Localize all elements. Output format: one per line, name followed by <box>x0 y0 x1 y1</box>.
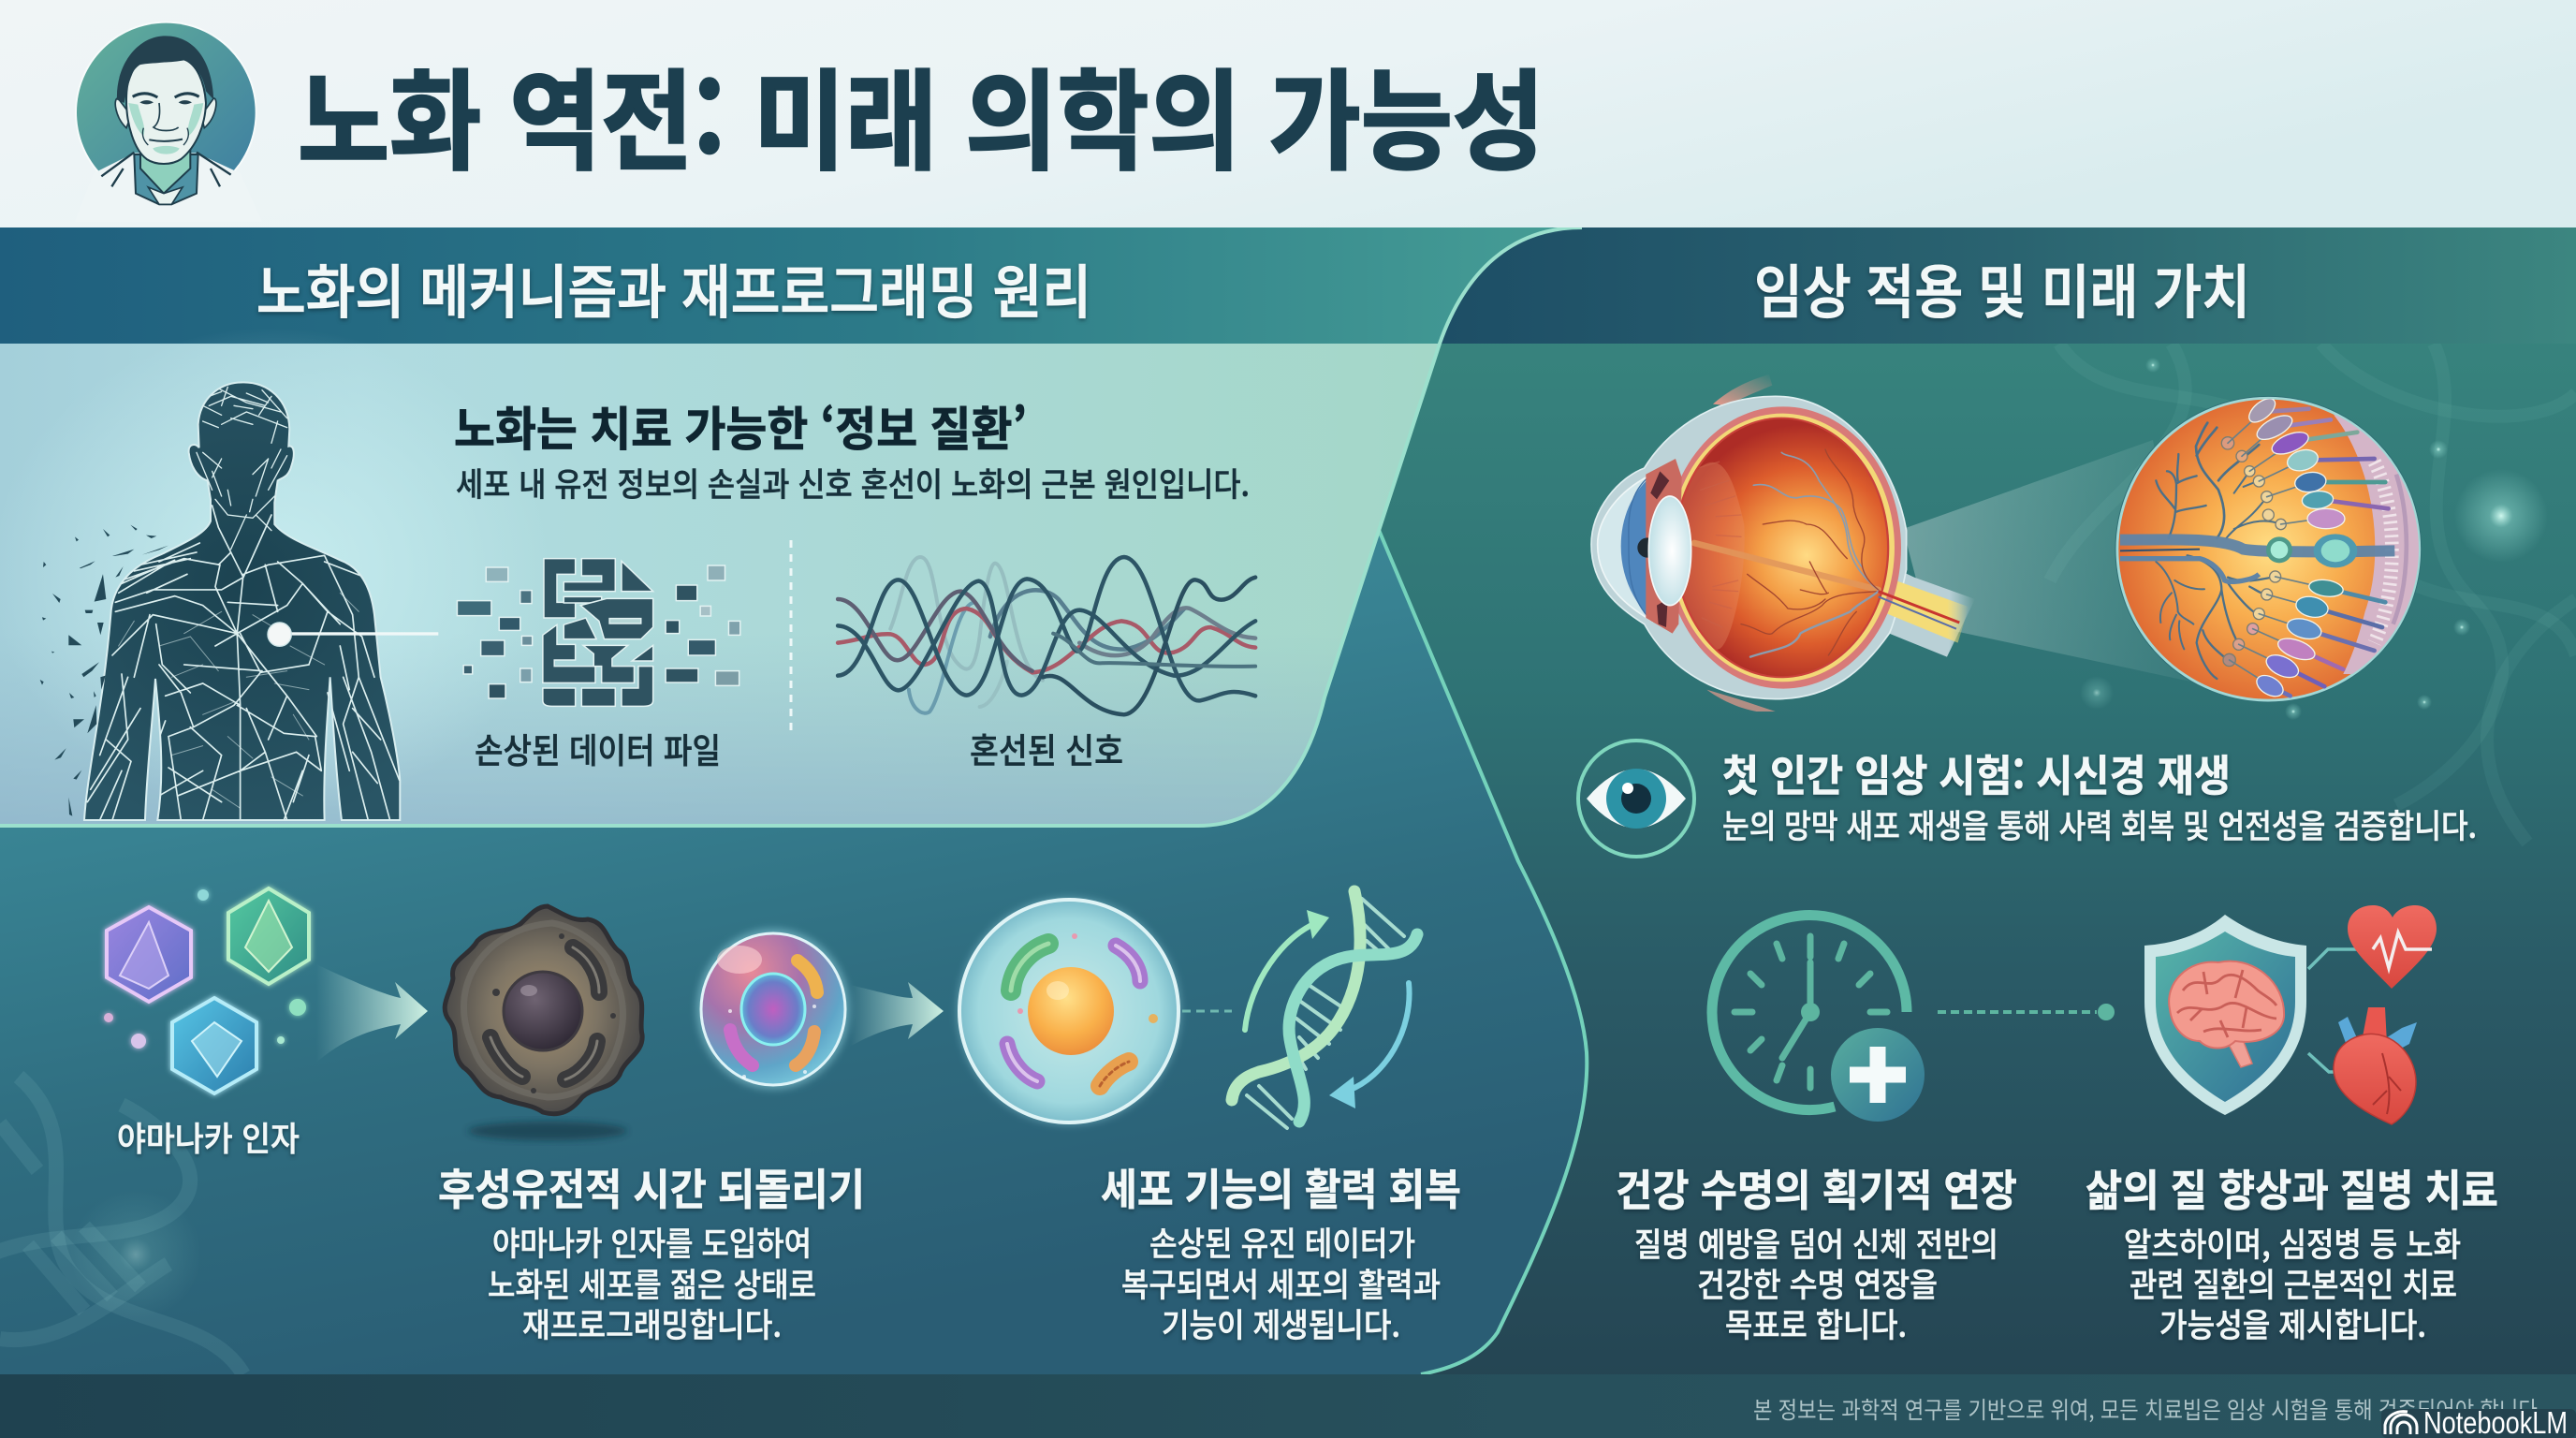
optic nerve <box>1870 574 1969 643</box>
DNA strand light <box>1289 934 1417 1122</box>
page header background <box>0 0 2576 227</box>
description: retinal regeneration: 눈의 망막 새포 재생을 통해 사력 회복 및 언전성을 검증합니다. <box>1722 800 2477 848</box>
receptor cells <box>2245 394 2345 700</box>
floating particles <box>104 889 306 1049</box>
eye muscles <box>1713 374 1772 405</box>
illustration: rejuvenated cell <box>957 897 1181 1125</box>
divider between icons <box>790 540 792 730</box>
title: 노화 역전: 미래 의학의 가능성 <box>298 35 1544 192</box>
label: tangled signal: 혼선된 신호 <box>970 723 1123 773</box>
illustration: magnified retina <box>2115 394 2422 702</box>
light top-left panel <box>0 344 1440 826</box>
description line 3: 기능이 제생됩니다. <box>1162 1299 1400 1347</box>
description line 2: 복구되면서 세포의 활력과 <box>1121 1259 1441 1307</box>
description line 3: 가능성을 제시합니다. <box>2159 1299 2426 1347</box>
illustration: reprogramming cell <box>696 929 850 1090</box>
purple crystal <box>107 907 191 1002</box>
label: Yamanaka factor: 야마나카 인자 <box>117 1112 300 1161</box>
marker dot and leader line <box>268 623 438 646</box>
brain <box>2169 961 2284 1067</box>
description line 1: 질병 예방을 덤어 신체 전반의 <box>1634 1219 1998 1267</box>
lower panel border <box>1379 530 1587 1374</box>
figure: fractured human body <box>40 382 438 820</box>
avatar: doctor portrait <box>75 22 262 222</box>
retina yellow ring <box>1670 414 1895 682</box>
ciliary body <box>1646 459 1682 634</box>
right panel background <box>1217 227 2576 1438</box>
light panel border <box>0 227 1582 826</box>
text block: epigenetic rewind <box>438 1156 865 1347</box>
icon: damaged data file <box>457 559 740 706</box>
receptor cell tails <box>2228 409 2389 696</box>
lower left panel <box>0 530 1587 1374</box>
description line 1: 알츠하이며, 심정병 등 노화 <box>2124 1219 2461 1267</box>
renewal arrow blue <box>1348 983 1410 1091</box>
description line 2: 관련 질환의 근본적인 치료 <box>2130 1259 2457 1307</box>
description line 1: 손상된 유진 테이터가 <box>1149 1218 1415 1266</box>
optic nerve sheath <box>1872 562 1975 657</box>
description line 2: 노화된 세포를 젊은 상태로 <box>488 1259 816 1307</box>
heading: 건강 수명의 획기적 연장 <box>1616 1157 2017 1219</box>
sclera <box>1591 396 1907 699</box>
figure crack lines <box>86 386 399 819</box>
optic nerve vessels <box>1879 592 1959 623</box>
heading: 삶의 질 향상과 질병 치료 <box>2086 1157 2498 1219</box>
glow behind figure <box>0 328 552 814</box>
icon: connectors to hearts <box>2308 949 2378 1072</box>
heading: information disease: 노화는 치료 가능한 ‘정보 질환’ <box>454 392 1027 460</box>
icon: eye badge <box>1578 741 1694 857</box>
cone: zoom beam from eye to retina <box>1903 440 2200 683</box>
arrow: to young cell <box>850 982 944 1047</box>
text block: cell vitality <box>1101 1156 1461 1347</box>
illustration: aged cell <box>445 906 642 1114</box>
choroid <box>1665 406 1901 689</box>
green crystal <box>228 888 309 984</box>
figure silhouette <box>84 382 400 820</box>
description line 1: 야마나카 인자를 도입하여 <box>492 1218 812 1266</box>
background decor: faint DNA right <box>2050 344 2576 843</box>
background sparkles right <box>2080 358 2548 720</box>
description line 3: 재프로그래밍합니다. <box>522 1299 782 1347</box>
dashed connector to DNA <box>1182 1009 1232 1013</box>
icon: heart with pulse <box>2348 905 2437 989</box>
connector nodes <box>2221 437 2286 667</box>
icon: Yamanaka factor crystals <box>104 888 309 1093</box>
lens <box>1648 496 1691 606</box>
ciliary folds and vessels <box>1676 449 1879 657</box>
footer bar <box>0 1374 2576 1438</box>
DNA strand mint <box>1232 891 1360 1100</box>
left section header band <box>0 227 1610 344</box>
renewal arrow green <box>1245 922 1318 1030</box>
blue crystal <box>172 998 256 1093</box>
dashed connector with dot <box>1938 1004 2115 1020</box>
DNA rungs <box>1247 899 1404 1128</box>
cornea and iris <box>1598 475 1652 621</box>
text block: healthspan <box>1616 1157 2017 1347</box>
illustration: eye cross-section <box>1591 374 1975 712</box>
shattered fragments <box>40 525 168 816</box>
chart: tangled signal waves <box>838 557 1255 714</box>
outer retinal layer <box>2334 415 2422 674</box>
heading: 후성유전적 시간 되돌리기 <box>438 1156 865 1218</box>
label: damaged data file: 손상된 데이터 파일 <box>475 723 721 773</box>
arrow: factors to aged cell <box>316 964 428 1063</box>
icon: anatomical heart <box>2334 1007 2417 1124</box>
light panel lower shade <box>0 344 1440 826</box>
heading: 세포 기능의 활력 회복 <box>1101 1156 1461 1218</box>
right section header band <box>1440 227 2576 344</box>
background decor: faint DNA lower left <box>0 1077 243 1374</box>
text block: quality of life <box>2086 1157 2498 1347</box>
left section heading: 노화의 메커니즘과 재프로그래밍 원리 <box>256 245 1091 330</box>
subheading: cause of aging: 세포 내 유전 정보의 손실과 신호 혼선이 노화의 근본 원인입니다. <box>456 459 1250 506</box>
vitreous chamber <box>1676 419 1887 676</box>
right section heading: 임상 적용 및 미래 가치 <box>1754 245 2250 330</box>
aged cell shadow <box>468 1122 627 1140</box>
description line 3: 목표로 합니다. <box>1725 1299 1907 1347</box>
icon: shield with brain <box>2144 915 2306 1115</box>
description line 2: 건강한 수명 연장을 <box>1697 1259 1938 1307</box>
nerve tree <box>2156 423 2281 679</box>
icon: DNA with renewal arrows <box>1232 891 1417 1128</box>
central cells <box>2266 534 2357 567</box>
background glow lower left <box>70 1189 201 1320</box>
icon: clock with plus <box>1712 916 1925 1122</box>
heading: first human clinical trial: 첫 인간 임상 시험: 시신경 재생 <box>1722 742 2231 804</box>
